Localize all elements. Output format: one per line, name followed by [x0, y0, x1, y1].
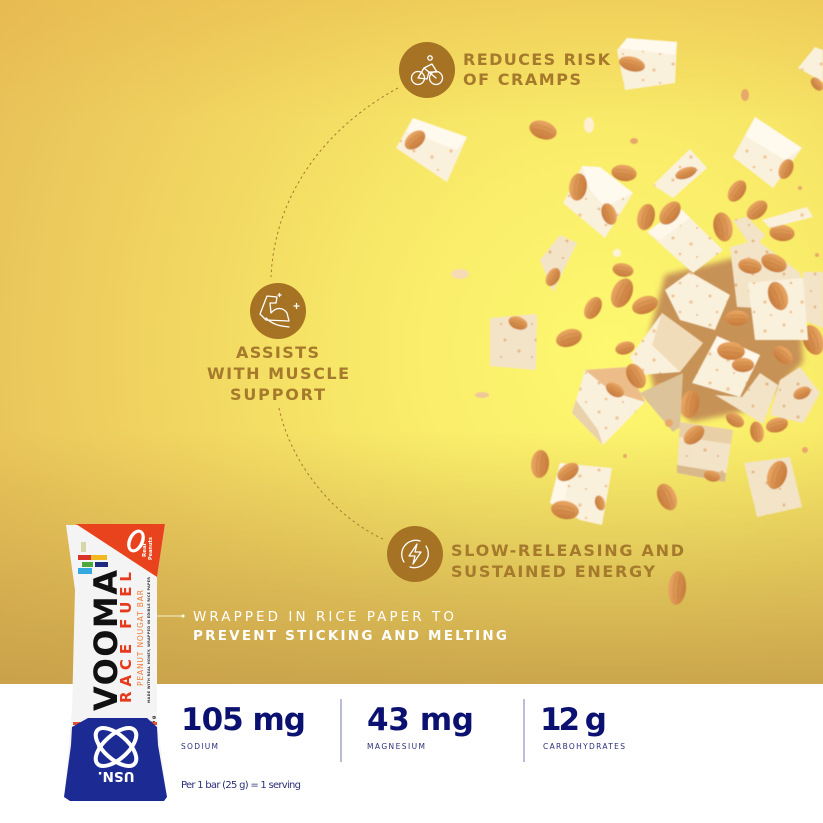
stat: sodium: SODIUM: [181, 742, 218, 751]
benefit: reduces risk of cramps: [399, 42, 617, 98]
wordmark: VOOMA: [87, 570, 125, 711]
label: SUSTAINED ENERGY: [451, 562, 655, 581]
blue base: [64, 718, 167, 801]
callout text: PREVENT STICKING AND MELTING: [193, 628, 507, 644]
cluster shadow mass: [645, 258, 803, 422]
peanut badge: [124, 527, 154, 560]
callout: rice paper: [157, 609, 507, 644]
crumbs: [451, 89, 819, 458]
image: exploding nougat and peanuts: [396, 38, 823, 606]
pointer line: [157, 614, 184, 618]
weight: 25 g: [151, 716, 157, 727]
icon: flexed arm: [250, 283, 306, 339]
stat: magnesium: 43 mg: [367, 702, 474, 738]
race fuel: RACE FUEL: [117, 572, 135, 703]
label: OF CRAMPS: [463, 70, 581, 89]
product: VOOMA bar: [64, 524, 167, 801]
small print: MADE WITH REAL HONEY, WRAPPED IN EDIBLE RICE PAPER: [147, 577, 151, 703]
white stats band: [0, 684, 823, 823]
callout text: WRAPPED IN RICE PAPER TO: [193, 609, 454, 625]
label: SLOW-RELEASING AND: [451, 541, 684, 560]
cube facets: lit tops and shaded sides: [406, 38, 802, 508]
label: ASSISTS: [236, 343, 319, 362]
icon: cyclist: [399, 42, 455, 98]
loose back almonds: [527, 117, 823, 444]
peanut badge: Peanuts: [148, 537, 154, 560]
logo: atom: [89, 721, 143, 773]
stats: nutrition: [181, 699, 625, 791]
label: WITH MUSCLE: [207, 364, 349, 383]
flavour: PEANUT NOUGAT BAR: [136, 590, 145, 686]
serving note: Per 1 bar (25 g) = 1 serving: [181, 780, 301, 791]
orange stripes: [73, 722, 157, 725]
colour badges: [78, 542, 108, 574]
icon: lightning bolt with cycle arrows: [387, 526, 443, 582]
brand USN: USN.: [97, 768, 135, 784]
label: REDUCES RISK: [463, 50, 611, 69]
wrapper body: [64, 525, 167, 797]
benefit: sustained energy: [387, 526, 691, 582]
peanut badge: Real: [142, 543, 148, 557]
nougat cubes: [396, 38, 823, 525]
front almonds: [401, 54, 823, 606]
stat: sodium: 105 mg: [181, 702, 306, 738]
stat: carbohydrates: [540, 702, 625, 751]
dashed arc connecting benefits: [271, 88, 398, 540]
stat: carbohydrates: 12 g: [540, 702, 607, 738]
stat: magnesium: MAGNESIUM: [367, 742, 425, 751]
benefit: muscle support: [207, 283, 356, 404]
red corner: [76, 524, 165, 577]
label: SUPPORT: [230, 385, 325, 404]
stat: carbohydrates: CARBOHYDRATES: [543, 742, 625, 751]
